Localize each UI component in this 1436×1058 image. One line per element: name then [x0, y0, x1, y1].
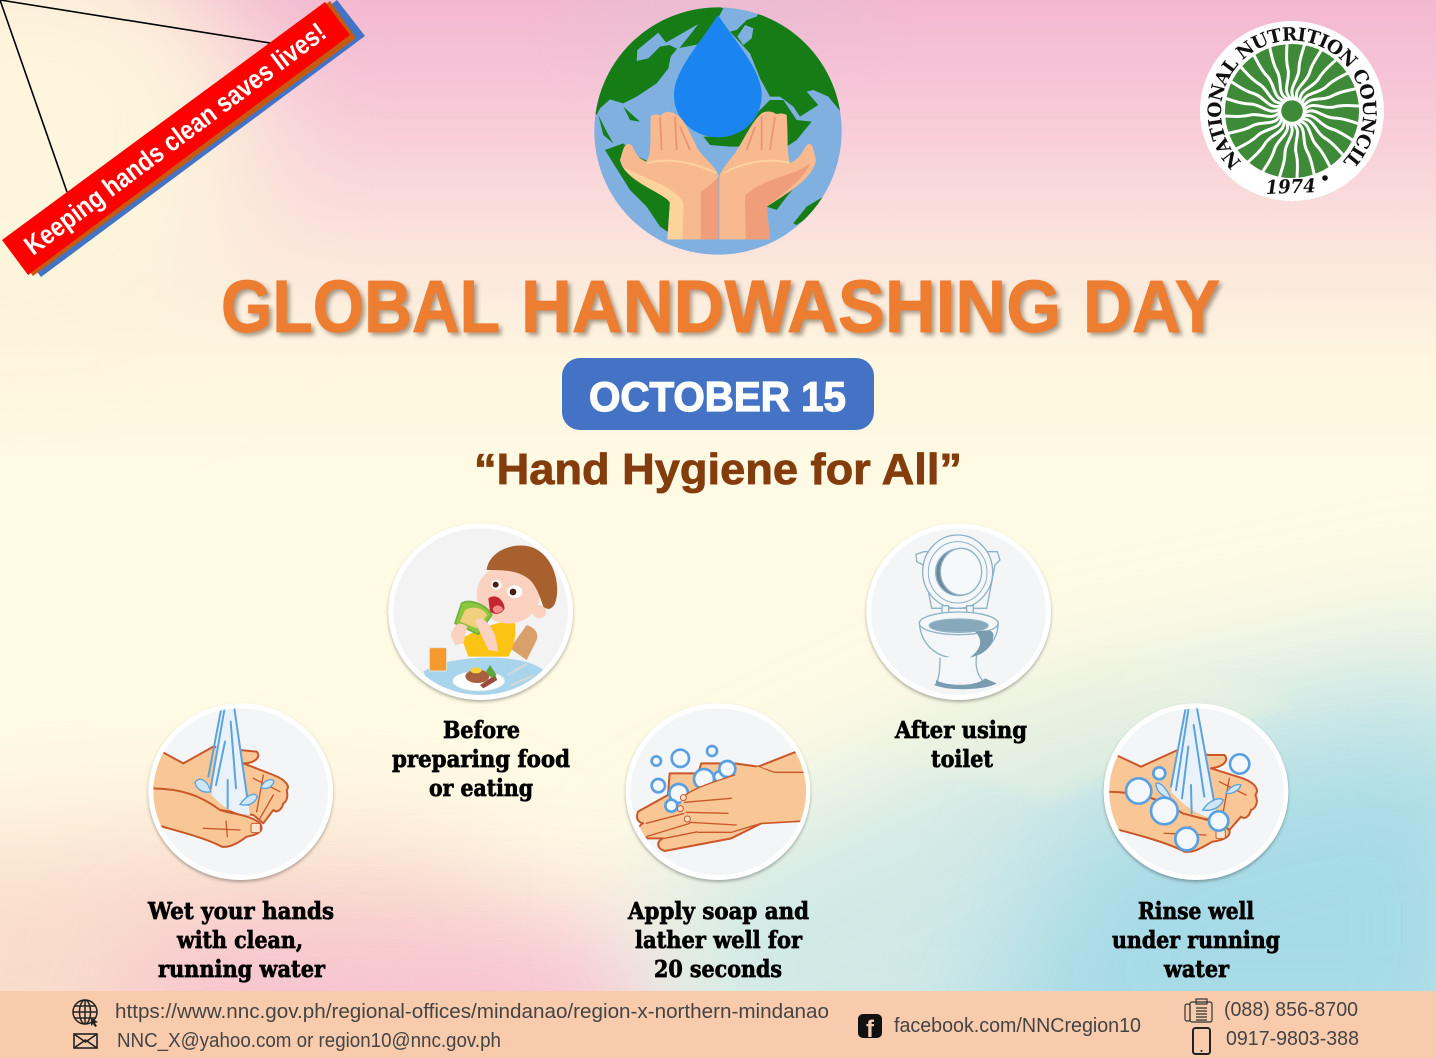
label: after using toilet: After using [894, 717, 1027, 744]
circle icon: toilet [866, 523, 1051, 700]
icon: globe [73, 1000, 98, 1027]
label: apply soap: 20 seconds [654, 956, 782, 983]
label: before preparing food: preparing food [392, 746, 570, 773]
icon: fax [1185, 999, 1212, 1022]
label: wet your hands: with clean, [176, 927, 303, 954]
circle icon: wet hands [147, 703, 333, 880]
logo: National Nutrition Council: 1974 [1265, 175, 1316, 199]
title [221, 265, 1220, 348]
mobile number: 0917-9803-388 [1226, 1028, 1359, 1050]
circle icon: apply soap [626, 703, 831, 880]
title: DAY [1083, 265, 1220, 348]
icon: facebook: f [866, 1016, 875, 1043]
icon: facebook [858, 1014, 882, 1043]
label: wet your hands: Wet your hands [147, 898, 334, 925]
title: GLOBAL [221, 265, 500, 348]
label: after using toilet [894, 717, 1027, 773]
label: apply soap [627, 898, 809, 983]
title: HANDWASHING [521, 265, 1061, 348]
label: rinse well: water [1163, 956, 1230, 983]
banner strings [0, 0, 270, 192]
website text: https://www.nnc.gov.ph/regional-offices/mindanao/region-x-northern-mindanao [115, 1001, 829, 1023]
email text: NNC_X@yahoo.com or region10@nnc.gov.ph [117, 1030, 501, 1052]
label: before preparing food: Before [443, 717, 520, 744]
label: before preparing food [392, 717, 570, 802]
date badge [562, 358, 874, 430]
label: apply soap: Apply soap and [627, 898, 809, 925]
facebook text: facebook.com/NNCregion10 [894, 1015, 1141, 1037]
label: after using toilet: toilet [931, 746, 993, 773]
label: wet your hands: running water [158, 956, 326, 983]
label: rinse well: Rinse well [1138, 898, 1254, 925]
icon: globe with hands and water drop [587, 0, 847, 255]
label: rinse well [1112, 898, 1280, 983]
icon: mail [74, 1034, 97, 1048]
footer band [0, 991, 1436, 1058]
fax number: (088) 856-8700 [1224, 999, 1358, 1021]
icon: mobile phone [1193, 1028, 1210, 1054]
label: apply soap: lather well for [635, 927, 803, 954]
label: rinse well: under running [1112, 927, 1280, 954]
theme heading: “Hand Hygiene for All” [474, 445, 962, 494]
label: wet your hands [147, 898, 334, 983]
circle icon: boy eating [388, 523, 573, 702]
date badge: OCTOBER 15 [589, 373, 846, 420]
logo: National Nutrition Council: NATIONAL NUTRITION COUNCIL [1207, 27, 1377, 170]
label: before preparing food: or eating [429, 775, 533, 802]
circle icon: rinse hands [1103, 703, 1288, 880]
